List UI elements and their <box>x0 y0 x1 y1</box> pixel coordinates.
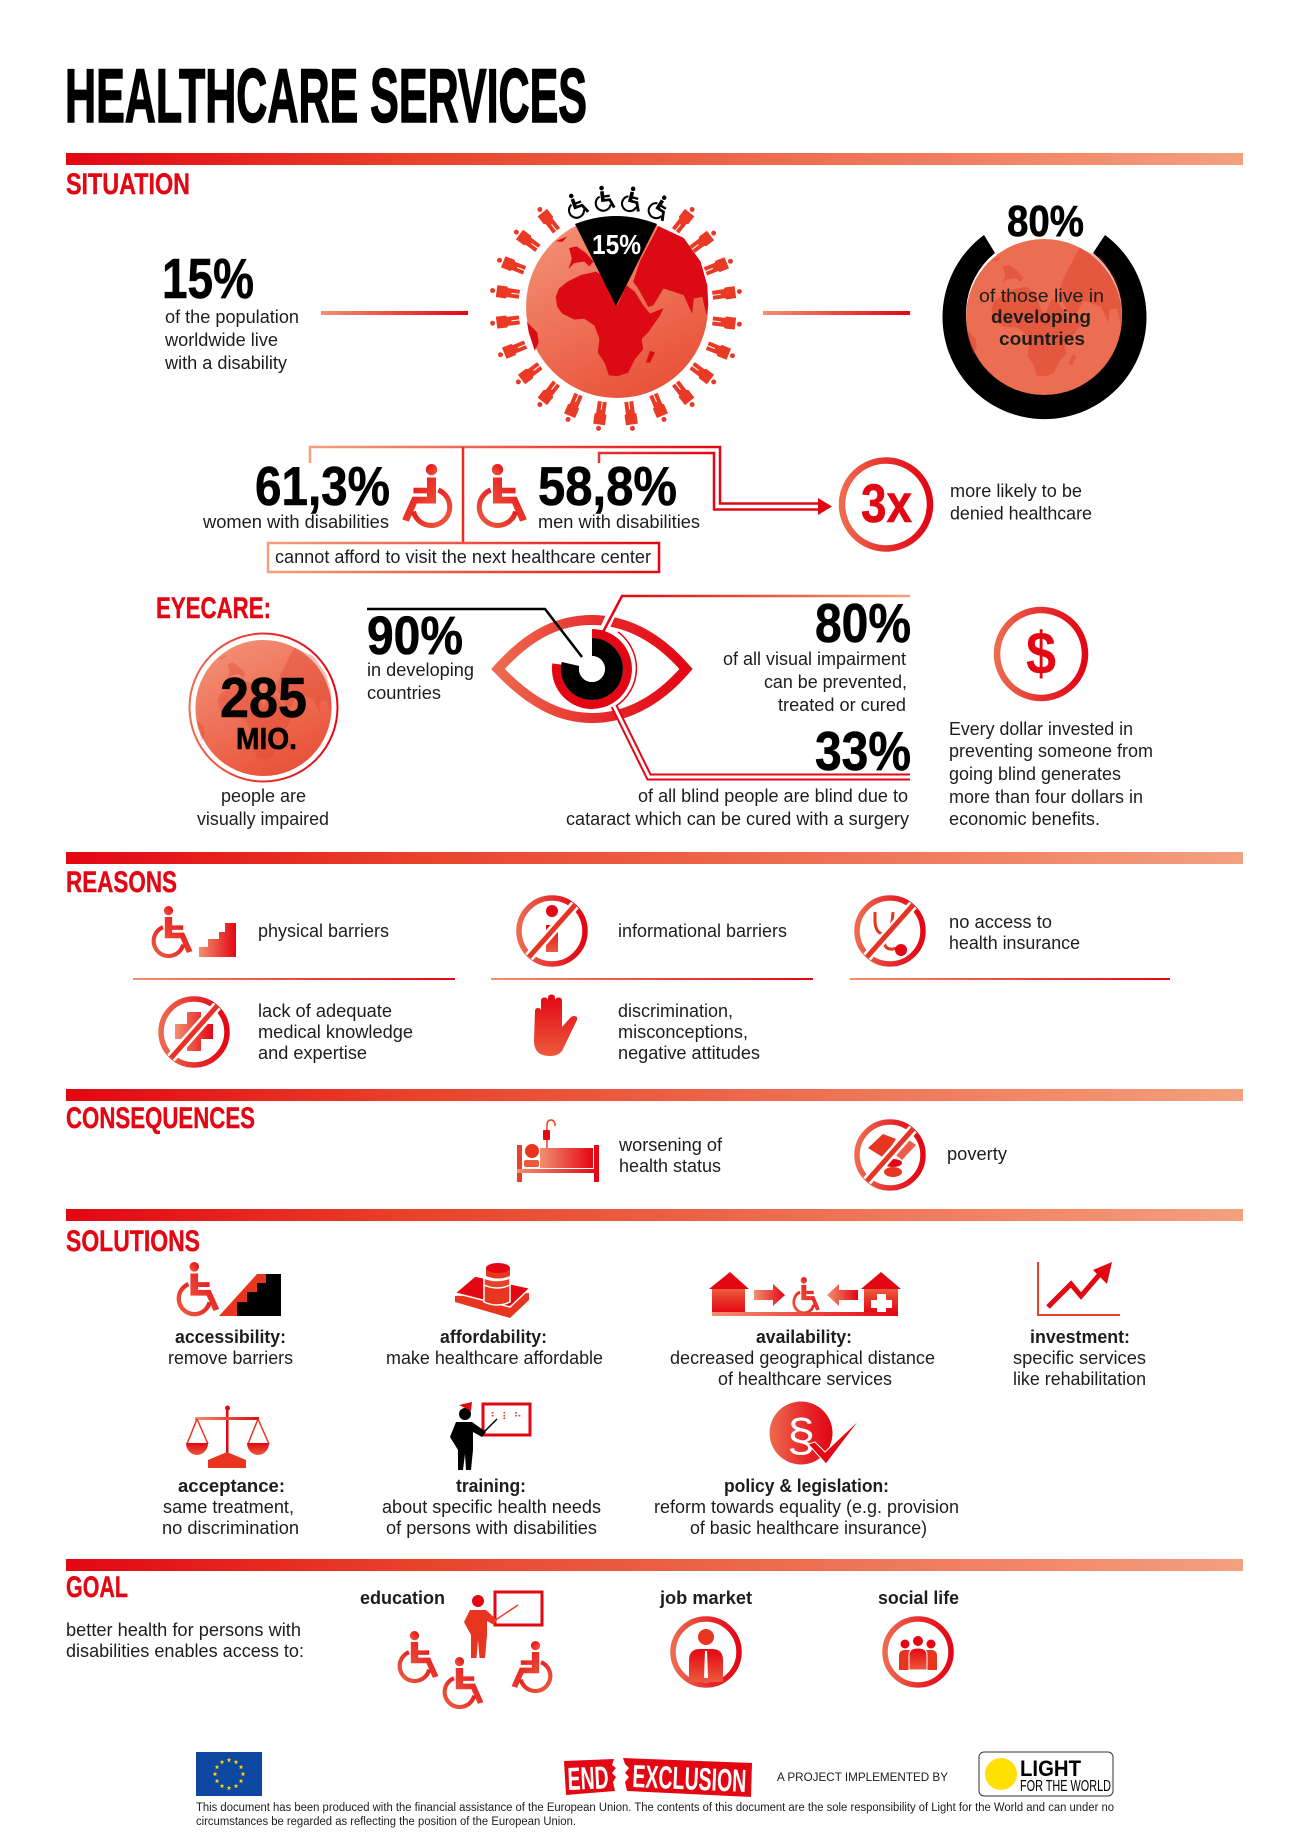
text: more likely: denied healthcare <box>950 504 1092 524</box>
icon: affordability <box>455 1263 530 1318</box>
icon: wheelchair man <box>479 464 527 525</box>
stat: women 61,3%: women with disabilities <box>202 512 389 532</box>
text: policy: reform towards equality (e.g. provision <box>654 1497 959 1517</box>
stat: 15% of the population <box>162 247 299 373</box>
text: policy: policy & legislation: <box>724 1476 889 1496</box>
text: acceptance: same treatment, <box>163 1497 294 1517</box>
icon: dollar circle: $ <box>1026 620 1056 687</box>
icon: stop hand <box>534 994 577 1056</box>
text: better health: better health for persons with <box>66 1620 301 1640</box>
text: discrimination <box>618 1001 760 1063</box>
text: discrimination: misconceptions, <box>618 1022 748 1042</box>
text: no access to health insurance: health insurance <box>949 933 1080 953</box>
text: lack of knowledge: lack of adequate <box>258 1001 392 1021</box>
stat: 80% preventable: treated or cured <box>778 695 906 715</box>
icon: education group <box>400 1592 550 1707</box>
globe: 80% in developing countries: 80% <box>1007 197 1084 246</box>
text: disclaimer: circumstances be regarded as reflecting the position of the European Union. <box>196 1816 576 1828</box>
icon: scales <box>186 1406 269 1468</box>
text: every dollar: going blind generates <box>949 764 1121 784</box>
text: training: about specific health needs <box>382 1497 601 1517</box>
text: every dollar: more than four dollars in <box>949 787 1143 807</box>
label: social life: social life <box>878 1588 959 1608</box>
icon: trainer at board <box>450 1402 530 1470</box>
text: lack of knowledge: and expertise <box>258 1043 367 1063</box>
globe: 285 mio: MIO. <box>236 721 297 756</box>
icon: investment chart <box>1038 1262 1120 1315</box>
text: affordability: make healthcare affordable <box>386 1348 603 1368</box>
text: every dollar: preventing someone from <box>949 741 1153 761</box>
text: no access to health insurance <box>949 912 1080 953</box>
icon: 3x circle <box>842 460 930 548</box>
connector right <box>763 311 910 315</box>
stat: 15% of the population: with a disability <box>164 353 287 373</box>
globe: 285 mio: 285 <box>220 666 307 730</box>
connector left <box>321 311 468 315</box>
icon: trainer at board: ⠃ ⠇ ⠓ <box>490 1412 522 1423</box>
text: every dollar: Every dollar invested in <box>949 719 1133 739</box>
stat: 80% preventable <box>723 592 911 715</box>
text: availability: decreased geographical distance <box>670 1348 935 1368</box>
heading: solutions: SOLUTIONS <box>66 1225 200 1258</box>
logo: Light for the World <box>979 1752 1113 1796</box>
icon: poverty <box>857 1122 923 1188</box>
text: acceptance: acceptance: <box>178 1476 285 1496</box>
text: worsening <box>618 1135 723 1176</box>
heading: goal: GOAL <box>66 1571 128 1604</box>
stat: 90%: in developing <box>367 660 474 680</box>
text: visually impaired <box>197 786 329 829</box>
text: poverty: poverty <box>947 1144 1007 1164</box>
stat: 80% preventable: 80% <box>815 592 911 654</box>
text: better health <box>66 1620 304 1661</box>
logo: End Exclusion <box>564 1758 752 1799</box>
label: job market: job market <box>659 1588 752 1608</box>
text: policy <box>654 1476 959 1538</box>
icon: dollar circle <box>997 610 1085 698</box>
callout: cannot afford: cannot afford to visit the next healthcare center <box>275 547 651 567</box>
stat: 33% cataract <box>566 720 911 829</box>
text: no access to health insurance: no access to <box>949 912 1052 932</box>
pointer to 90% <box>367 609 582 657</box>
globe with 15% wedge: 15% <box>592 229 641 260</box>
pointer to 33% <box>614 706 910 777</box>
text: training: of persons with disabilities <box>386 1518 597 1538</box>
text: lack of knowledge: medical knowledge <box>258 1022 413 1042</box>
black wheelchair icons above globe <box>563 185 676 223</box>
icon: accessibility <box>179 1262 281 1316</box>
icon: 3x circle: 3x <box>861 474 912 534</box>
icon: hospital bed <box>517 1120 599 1182</box>
globe: 80% in developing countries: countries <box>999 329 1085 349</box>
heading: eyecare: EYECARE: <box>156 592 271 625</box>
text: investment: like rehabilitation <box>1013 1369 1146 1389</box>
globe: 80% in developing countries: of those live in <box>979 286 1104 306</box>
text: discrimination: negative attitudes <box>618 1043 760 1063</box>
icon: social life <box>885 1619 951 1685</box>
logo: Light for the World: LIGHT <box>1020 1756 1082 1781</box>
text: better health: disabilities enables access to: <box>66 1641 304 1661</box>
heading: situation: SITUATION <box>66 168 190 201</box>
text: availability: availability: <box>756 1327 852 1347</box>
icon: physical barriers <box>154 906 236 957</box>
stat: men 58,8%: 58,8% <box>538 455 677 517</box>
section bar: situation <box>66 153 1243 165</box>
globe with 15% wedge <box>526 216 708 398</box>
text: acceptance <box>162 1476 299 1538</box>
stat: 80% preventable: of all visual impairment <box>723 649 906 669</box>
text: worsening: health status <box>619 1156 721 1176</box>
stat: women 61,3%: 61,3% <box>255 455 390 517</box>
stat: 90%: countries <box>367 683 441 703</box>
stat: 33% cataract: of all blind people are blind due to <box>638 786 908 806</box>
logo: End Exclusion: END <box>567 1759 609 1797</box>
globe: 80% in developing countries <box>942 197 1146 419</box>
text: worsening: worsening of <box>618 1135 723 1155</box>
text: accessibility: remove barriers <box>168 1348 293 1368</box>
text: more likely: more likely to be <box>950 481 1082 501</box>
arrowhead <box>818 498 832 515</box>
pointer to 80% <box>604 610 613 630</box>
icon: lack of medical knowledge <box>161 999 227 1065</box>
label: education: education <box>360 1588 445 1608</box>
heading: consequences: CONSEQUENCES <box>66 1102 255 1135</box>
heading: reasons: REASONS <box>66 866 177 899</box>
logo: Light for the World: FOR THE WORLD <box>1020 1778 1111 1795</box>
stat: 15% of the population: 15% <box>162 247 254 311</box>
text: affordability: affordability: <box>440 1327 547 1347</box>
text: training: training: <box>456 1476 526 1496</box>
thin iris arc <box>616 632 636 706</box>
text: acceptance: no discrimination <box>162 1518 299 1538</box>
icon: no health insurance <box>857 898 923 964</box>
logo: End Exclusion: EXCLUSION <box>632 1758 747 1799</box>
wedge <box>575 216 657 306</box>
stat: 90%: 90% <box>367 606 463 666</box>
icon: availability <box>709 1272 901 1316</box>
text: visually impaired: people are <box>221 786 306 806</box>
text: physical barriers: physical barriers <box>258 921 389 941</box>
bracket lines linking women and men stats <box>310 447 832 543</box>
text: more likely <box>950 481 1092 524</box>
icon: wheelchair woman <box>402 464 450 525</box>
text: investment: investment: <box>1030 1327 1130 1347</box>
logo: EU flag <box>196 1752 262 1796</box>
text: a project implemented by: A PROJECT IMPLEMENTED BY <box>777 1772 948 1784</box>
text: visually impaired: visually impaired <box>197 809 329 829</box>
text: disclaimer <box>196 1802 1114 1828</box>
text: investment <box>1013 1327 1146 1389</box>
text: every dollar <box>949 719 1153 829</box>
stat: 80% preventable: can be prevented, <box>764 672 907 692</box>
text: availability <box>670 1327 935 1389</box>
text: informational barriers: informational barriers <box>618 921 787 941</box>
icon: informational barriers <box>519 898 585 964</box>
stat: 15% of the population: worldwide live <box>164 330 278 350</box>
icon: paragraph with check <box>770 1402 861 1464</box>
text: investment: specific services <box>1013 1348 1146 1368</box>
section bar: consequences <box>66 1089 1243 1101</box>
stat: 15% of the population: of the population <box>165 307 299 327</box>
text: availability: of healthcare services <box>718 1369 892 1389</box>
text: affordability <box>386 1327 603 1368</box>
dividers <box>133 978 455 980</box>
callout: cannot afford <box>268 543 659 572</box>
ring of people around the globe <box>489 204 743 432</box>
text: accessibility <box>168 1327 293 1368</box>
section bar: goal <box>66 1559 1243 1571</box>
text: every dollar: economic benefits. <box>949 809 1100 829</box>
text: disclaimer: This document has been produced with the financial assistance of the European Union. The contents of this document are the sole responsibility of Light for the World and can under no <box>196 1802 1114 1814</box>
stat: men 58,8%: men with disabilities <box>538 512 700 532</box>
section bar: reasons <box>66 852 1243 864</box>
icon: paragraph with check: § <box>787 1409 815 1461</box>
icon: job market <box>673 1619 739 1685</box>
text: lack of knowledge <box>258 1001 413 1063</box>
stat: 33% cataract: cataract which can be cured with a surgery <box>566 809 909 829</box>
stat: 90% <box>367 606 474 703</box>
text: policy: of basic healthcare insurance) <box>690 1518 927 1538</box>
text: accessibility: accessibility: <box>175 1327 286 1347</box>
stat: 33% cataract: 33% <box>815 720 911 782</box>
section bar: solutions <box>66 1209 1243 1221</box>
title: HEALTHCARE SERVICES <box>65 54 587 139</box>
text: training <box>382 1476 601 1538</box>
stat: women 61,3% <box>202 455 390 532</box>
globe: 285 mio <box>190 634 338 782</box>
globe: 80% in developing countries: developing <box>991 307 1091 327</box>
eye diagram <box>367 596 910 777</box>
text: discrimination: discrimination, <box>618 1001 733 1021</box>
